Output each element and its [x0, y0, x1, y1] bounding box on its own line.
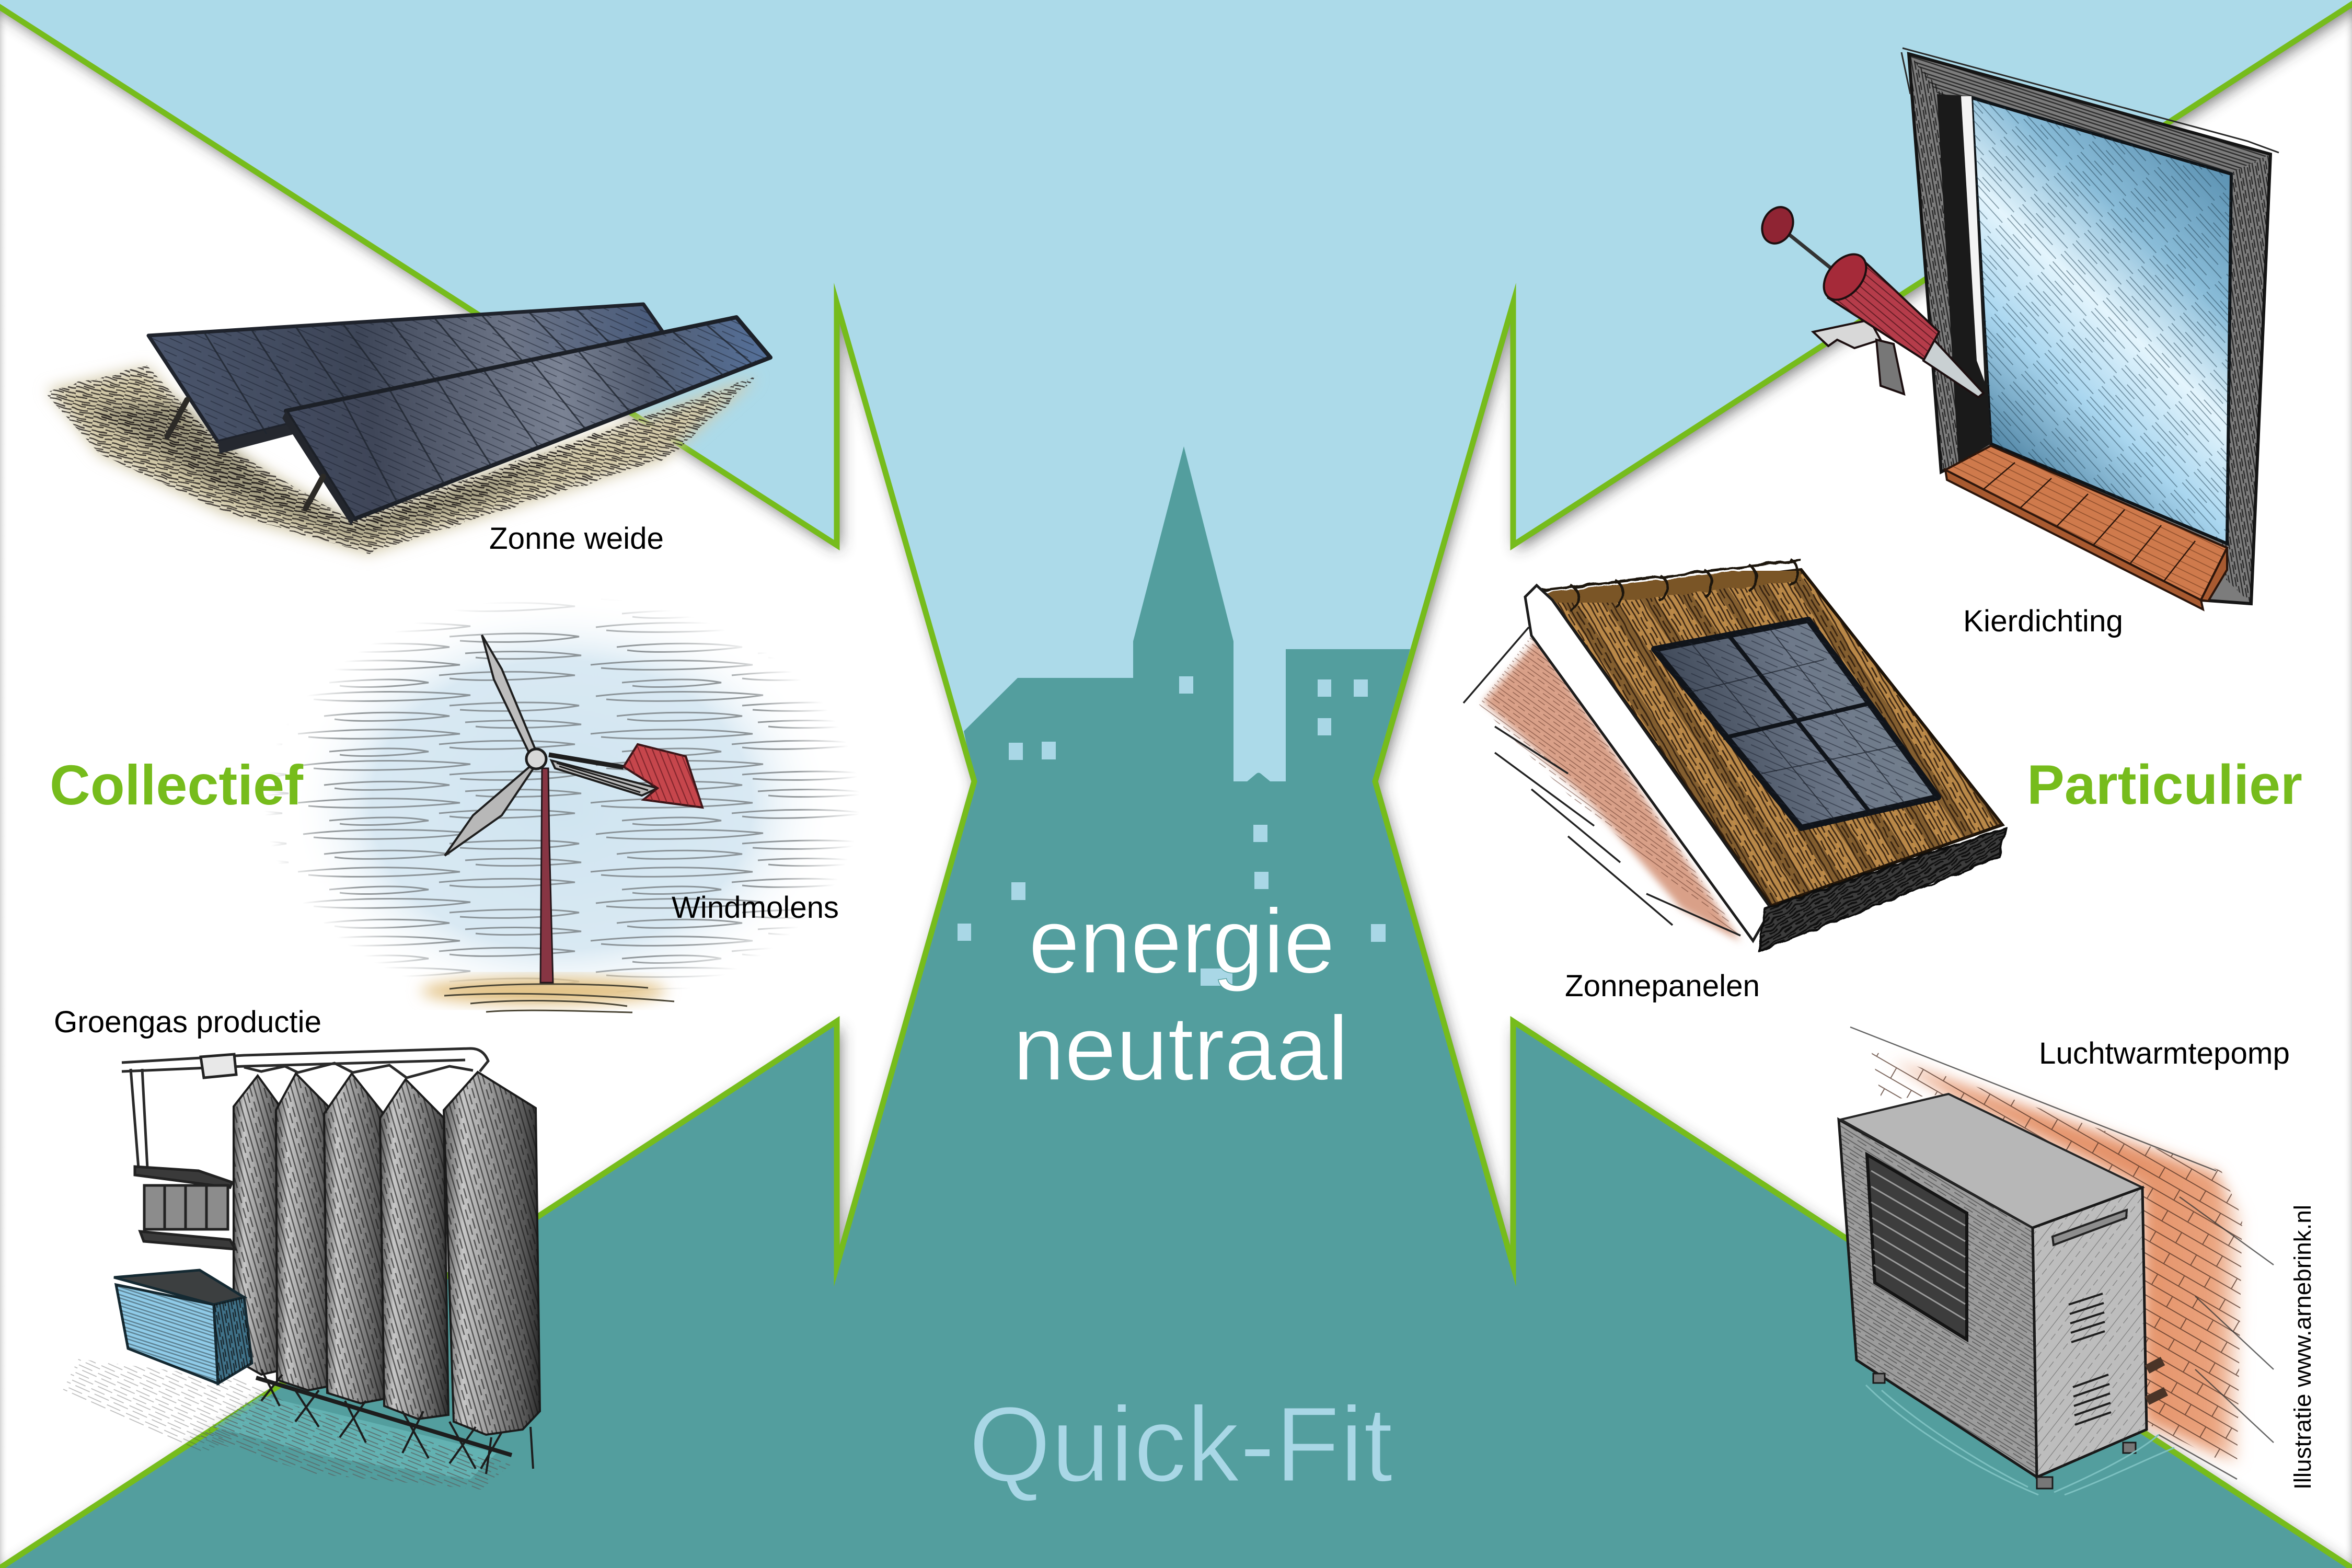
solar panel supports [167, 400, 323, 508]
sky haze [290, 598, 834, 1011]
label: Zonnepanelen: Zonnepanelen [1565, 969, 1760, 1003]
label: Luchtwarmtepomp: Luchtwarmtepomp [2039, 1036, 2290, 1070]
sky panel: light blue upper half [0, 0, 2352, 781]
illustration: solar field [44, 304, 770, 554]
tank legs and bottom pipe [256, 1369, 533, 1474]
heat pump left face [1839, 1120, 2037, 1477]
heat pump handle [2053, 1210, 2127, 1245]
white barge board [1525, 585, 1771, 941]
roof eave [1759, 828, 2005, 951]
tank 4 [380, 1079, 448, 1419]
turbine ground [421, 977, 674, 1012]
ground scratches on teal [199, 1396, 512, 1490]
roof tiles [1542, 559, 2002, 906]
back solar panel row [148, 304, 663, 454]
heat pump ground strokes [1866, 1385, 2174, 1495]
front solar panel row [282, 317, 770, 525]
turbine hub [526, 749, 546, 769]
title: energie: energie [1029, 891, 1335, 993]
city skyline silhouette [964, 446, 1410, 815]
filter rack [135, 1167, 235, 1249]
ground panel: teal lower half [0, 781, 2352, 1568]
heat pump feet [1873, 1374, 2136, 1489]
window glass [1971, 98, 2231, 544]
caulking gun [1756, 202, 1984, 397]
heat pump fan grille [1867, 1155, 1967, 1340]
label: Windmolens: Windmolens [672, 891, 839, 925]
tank 5 [444, 1072, 540, 1435]
tank 1 [234, 1076, 285, 1375]
wind scribbles [269, 602, 855, 990]
blue tank box [114, 1270, 252, 1383]
window reveal [1937, 94, 1991, 464]
credit: illustrator: Illustratie www.arnebrink.nl [2289, 1205, 2316, 1490]
turbine tail vane [624, 744, 702, 808]
roof solar panel [1654, 620, 1938, 828]
brick gable [1463, 627, 1744, 942]
top gas pipes [122, 1048, 488, 1168]
label: Zonne weide: Zonne weide [489, 522, 664, 556]
ground scratches on white [63, 1359, 293, 1453]
illustration: wind turbine [251, 596, 868, 1014]
heat pump top [1841, 1094, 2142, 1228]
tank 3 [324, 1074, 388, 1403]
turbine tower [540, 768, 553, 983]
brick wall [1850, 1027, 2274, 1479]
turbine blade up [482, 635, 536, 755]
illustration: window with caulking gun [1756, 48, 2279, 609]
label: Groengas productie: Groengas productie [54, 1005, 321, 1039]
pipe valve box [201, 1054, 236, 1078]
label: Kierdichting: Kierdichting [1963, 604, 2123, 638]
heat pump pipes [2147, 1361, 2166, 1401]
title: neutraal: neutraal [1013, 998, 1348, 1100]
heading: Collectief: Collectief [50, 753, 304, 816]
tank 2 [276, 1074, 335, 1390]
window frame [1901, 48, 2279, 604]
illustration: green gas plant [63, 1048, 540, 1490]
turbine blade down [445, 764, 536, 856]
turbine tail boom [549, 755, 658, 795]
illustration: air source heat pump [1839, 1027, 2274, 1495]
heading: Particulier: Particulier [2027, 753, 2302, 816]
brand: Quick-Fit: Quick-Fit [969, 1385, 1393, 1504]
window sill [1945, 446, 2227, 609]
ground under solar field [44, 366, 758, 554]
heat pump side vents [2069, 1294, 2111, 1425]
heat pump right face [2033, 1187, 2147, 1477]
lit windows [958, 676, 1386, 986]
illustration: roof with solar panels [1463, 559, 2005, 951]
